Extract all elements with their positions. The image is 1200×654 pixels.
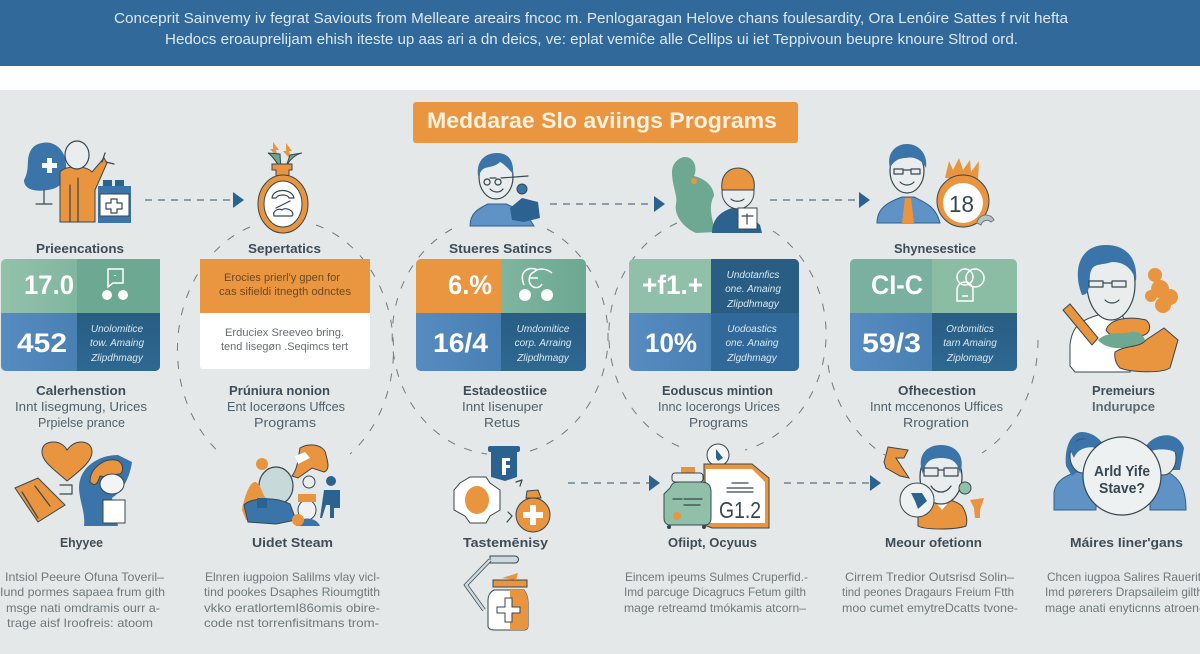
caption 3: Retus <box>484 415 521 430</box>
card 3: Zlipdhmagy <box>516 353 570 364</box>
caption 2 <box>227 383 345 430</box>
caption 1: Calerhenstion <box>36 383 126 398</box>
caption 2: Prúniura nonion <box>229 383 330 398</box>
heading: Uidet Steam: Uidet Steam <box>252 535 333 550</box>
caption 6 <box>1092 383 1155 414</box>
title <box>413 102 798 143</box>
header banner: Conceprit Sainvemy iv fegrat Saviouts from Melleare areairs fncoc m. Penlogaragan Helove chans foulesardity, Ora Lenóire Sattes f rvit hefta <box>114 10 1069 27</box>
card 2 <box>200 259 370 369</box>
body text 4: mage retreamd tmókamis atcorn– <box>624 601 806 615</box>
arrow 2 <box>550 196 665 212</box>
icon: machine and document G1.2: G1.2 <box>719 497 761 523</box>
caption 3: Innt Iisenuper <box>462 399 544 414</box>
caption 1: Innt Iisegmung, Urices <box>15 399 147 414</box>
body text 6: mage anati enyticnns atroen- <box>1045 601 1200 615</box>
body text 6 <box>1045 570 1200 615</box>
caption 6: Indurupce <box>1092 399 1155 414</box>
body text 1: trage aisf Iroofreis: atoom <box>7 616 153 630</box>
caption 5: Ofhecestion <box>898 383 976 398</box>
card 1 <box>1 259 160 371</box>
card 1: 17.0 <box>24 270 74 300</box>
caption 5: Innt mccenonos Uffices <box>870 399 1003 414</box>
card 5 <box>850 259 1017 371</box>
body text 5: Cirrem Tredior Outsrisd Solin– <box>845 570 1014 584</box>
title: Meddarae Slo aviings Programs <box>427 108 777 133</box>
icon: man and orange timer 18 <box>877 144 994 227</box>
caption 3: Estadeostiice <box>463 383 547 398</box>
caption 1 <box>15 383 147 430</box>
body text 2 <box>204 570 380 630</box>
body text 4: Imd parcuge Dicagrucs Fetum gilth <box>624 585 806 599</box>
card 4: Uodoastics <box>727 324 777 335</box>
card 2: Erduciex Sreeveo bring. <box>225 327 344 339</box>
card 4: +f1.+ <box>642 270 703 300</box>
card 5: 59/3 <box>862 328 921 358</box>
icon: person with glasses and cubes <box>470 153 540 226</box>
card 3: Umdomitice <box>517 324 570 335</box>
card 2: tend Iisegøn .Seqimcs tert <box>221 341 348 353</box>
card 1: 452 <box>17 328 67 358</box>
card 5: Ziplomagy <box>946 353 994 364</box>
caption 5 <box>870 383 1003 430</box>
caption 4: Eoduscus mintion <box>662 383 773 398</box>
icon: vase with gauge <box>258 142 308 233</box>
dashed circles <box>177 223 1038 455</box>
body text 1: Iund pormes sapaea frum gith <box>0 585 165 599</box>
icon: woman with pencil and orange shapes <box>1063 245 1178 372</box>
heading: Shynesestice: Shynesestice <box>894 241 976 256</box>
arrow 1 <box>145 192 244 208</box>
header banner: Hedocs eroauprelijam ehish iteste up aas ari a dn deics, ve: eplat vemiĉe alle Cellips ui iet Teppivoun beupre knoure Sltrod ord. <box>165 31 1018 48</box>
icon: worker with hat and green figure <box>672 157 762 233</box>
white band <box>0 66 1200 90</box>
icon: two people with speech circle: Arld Yife <box>1094 463 1150 480</box>
card 3: 16/4 <box>433 328 488 358</box>
card 1: Unolomitice <box>91 324 144 335</box>
card 4: Zlgdhmagy <box>726 353 778 364</box>
heading: Sepertatics: Sepertatics <box>248 241 321 256</box>
caption 4 <box>658 383 780 430</box>
card 4: Undotanfics <box>727 270 779 281</box>
card 3 <box>416 259 586 371</box>
caption 3 <box>462 383 547 430</box>
body text 5 <box>842 570 1018 615</box>
heading: Máires Iiner'gans: Máires Iiner'gans <box>1070 535 1183 550</box>
heading: Meour ofetionn: Meour ofetionn <box>885 535 982 550</box>
body text 5: tind peones Dragaurs Freium Ftth <box>842 585 1014 599</box>
card 5: tarn Amaing <box>943 338 997 349</box>
body text 1: Intsiol Peeure Ofuna Toveril– <box>5 570 164 584</box>
card 5: CI-C <box>871 270 923 300</box>
arrow 4 <box>568 475 660 491</box>
caption 5: Rrogration <box>903 415 969 430</box>
heading: Stueres Satincs: Stueres Satincs <box>449 241 552 256</box>
card 4 <box>629 259 799 371</box>
body text 2: Elnren iugpoion Salilms vlay vicl- <box>205 570 380 584</box>
card 4: one. Amaing <box>725 284 781 295</box>
arrow 5 <box>784 475 881 491</box>
icon: bottle with lamp arm <box>466 556 528 630</box>
icon: two people with speech circle <box>1054 432 1186 515</box>
body text 4: Eincem ipeums Sulmes Cruperfid.- <box>625 570 808 584</box>
heading: Ehyyee: Ehyyee <box>60 535 103 550</box>
caption 2: Programs <box>254 415 317 430</box>
card 4: Zlipdhmagy <box>726 299 780 310</box>
body text 2: vkko eratlortemI86omis obire- <box>204 601 380 615</box>
header banner <box>0 0 1200 66</box>
card 5: Ordomitics <box>946 324 994 335</box>
arrow 3 <box>770 192 870 208</box>
caption 4: Innc Iocerongs Urices <box>658 399 780 414</box>
body text 2: tind pookes Dsaphes Rioumgtith <box>204 585 380 599</box>
body text 1: msge nati omdramis ourr a- <box>6 601 160 615</box>
caption 4: Programs <box>689 415 749 430</box>
caption 2: Ent Iocerøons Uffces <box>227 399 345 414</box>
icon: man and orange timer 18: 18 <box>949 191 974 217</box>
icon: machine and document G1.2 <box>664 444 769 529</box>
body text 2: code nst torrenfisitmans trom- <box>204 616 379 630</box>
caption 1: Prpielse prance <box>38 415 125 430</box>
card 4: one. Anaing <box>725 338 779 349</box>
body text 5: moo cumet emytreDcatts tvone- <box>842 601 1018 615</box>
heading: Tastemēnisy: Tastemēnisy <box>463 535 549 550</box>
card 2: Erocies prierl'y gpen for <box>224 272 340 284</box>
heading: Ofiipt, Ocyuus: Ofiipt, Ocyuus <box>668 535 757 550</box>
body text 1 <box>0 570 165 630</box>
card 2: cas sifieldi itnegth odnctes <box>219 286 351 298</box>
card 1: tow. Amaing <box>90 338 144 349</box>
card 3: corp. Arraing <box>515 338 572 349</box>
icon: badge, gear and money bag <box>454 446 550 532</box>
icon: person with medical box <box>24 141 131 223</box>
card 1: Zlipdhmagy <box>90 353 144 364</box>
body text 4 <box>624 570 808 615</box>
icon: smiling man with pin <box>884 445 984 529</box>
icon: heart, book and person <box>15 442 132 526</box>
card 3: 6.% <box>448 270 492 300</box>
icon: team and equipment cluster <box>242 445 340 526</box>
icon: two people with speech circle: Stave? <box>1099 480 1145 497</box>
card 4: 10% <box>645 328 697 358</box>
caption 6: Premeiurs <box>1092 383 1155 398</box>
heading: Prieencations: Prieencations <box>36 241 124 256</box>
